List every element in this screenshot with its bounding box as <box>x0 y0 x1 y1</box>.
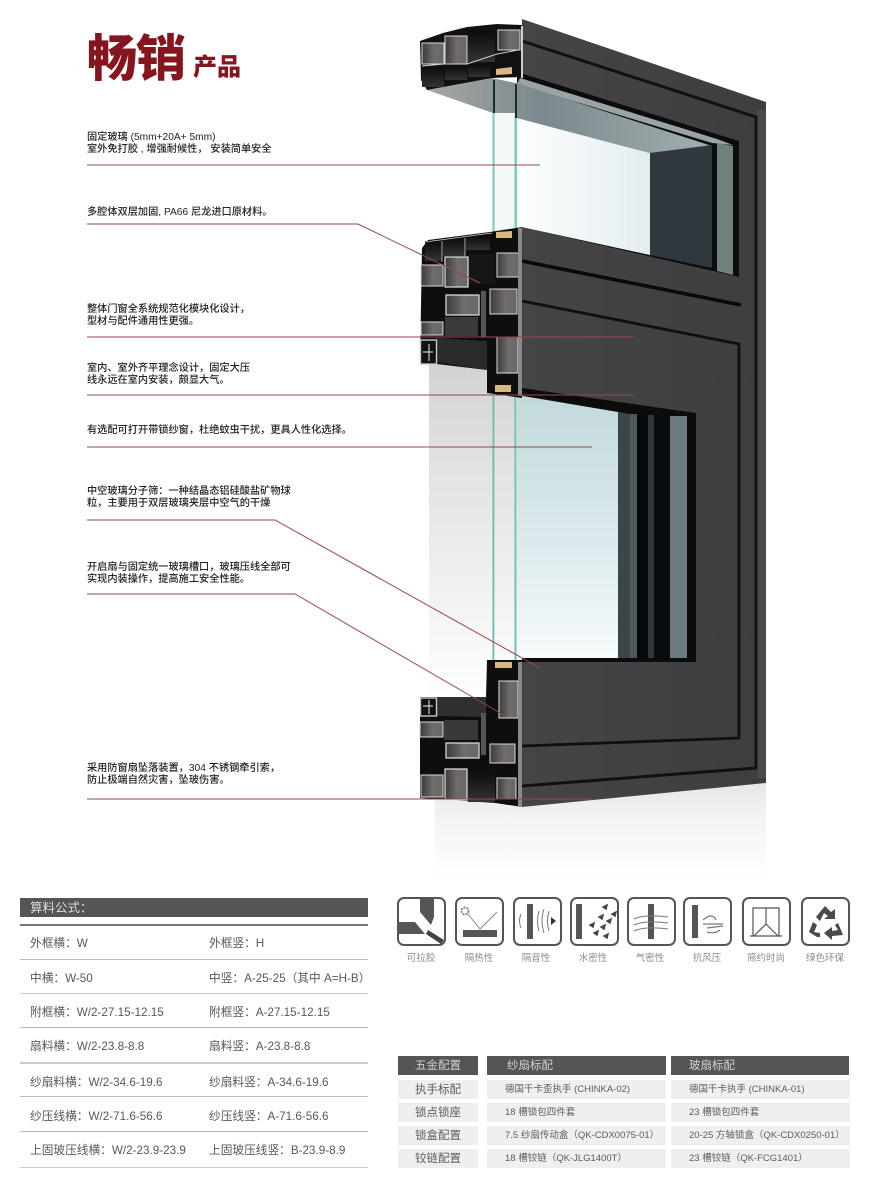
double glazing panes <box>492 80 517 662</box>
row 5 <box>20 1074 368 1097</box>
label: sealant-free: 可拉胶 <box>407 953 435 964</box>
header: hardware: 五金配置 <box>415 1060 461 1072</box>
main frame face <box>522 19 766 807</box>
icon: air tightness <box>628 898 675 945</box>
row 7: 上固玻压线竖：B-23.9-8.9 <box>209 1144 345 1157</box>
lower opening sash window <box>517 388 696 662</box>
row: hinge: 18 槽铰链（QK-JLG1400T） <box>505 1153 627 1164</box>
icon: sealant-free <box>398 898 445 945</box>
callout: molecular sieve <box>87 485 291 509</box>
callout: flush design: 线永远在室内安装，颇显大气。 <box>87 375 230 386</box>
row: lock box: 锁盒配置 <box>415 1130 461 1142</box>
row 3: 附框竖：A-27.15-12.15 <box>209 1006 330 1019</box>
callout: anti-fall device <box>87 762 280 786</box>
row 6: 纱压线竖：A-71.6-56.6 <box>209 1110 329 1123</box>
row: handle: 德国千卡歪执手 (CHINKA-02) <box>505 1084 630 1095</box>
label: green recycling: 绿色环保 <box>806 953 844 964</box>
callout: fixed glass <box>87 131 272 155</box>
row: lock seat <box>398 1103 850 1122</box>
callout: anti-fall device: 采用防窗扇坠落装置，304 不锈钢牵引索， <box>87 763 280 774</box>
header: glass sash <box>671 1056 849 1075</box>
icon: simple fashion <box>743 898 790 945</box>
row 2 <box>20 970 368 994</box>
row: lock seat: 18 槽锁包四件套 <box>505 1107 575 1118</box>
middle profile section <box>420 227 522 398</box>
icon: wind pressure <box>684 898 731 945</box>
callout: fixed glass: 固定玻璃 (5mm+20A+ 5mm) <box>87 132 216 143</box>
icon: green recycling <box>802 898 849 945</box>
label: simple fashion: 简约时尚 <box>747 953 785 964</box>
callout: anti-fall device: 防止极端自然灾害，坠玻伤害。 <box>87 775 230 786</box>
header: screen sash <box>487 1056 666 1075</box>
row: lock seat: 23 槽锁包四件套 <box>689 1107 759 1118</box>
callout: screen: 有选配可打开带锁纱窗，杜绝蚊虫干扰，更具人性化选择。 <box>87 425 352 436</box>
floor reflection <box>435 783 766 880</box>
callout: modular design <box>87 303 250 327</box>
row: handle <box>398 1080 850 1099</box>
formulas heading <box>20 898 368 917</box>
product illustration: window corner cross-section <box>87 19 766 838</box>
icon: heat insulation <box>456 898 503 945</box>
row: handle: 德国千卡执手 (CHINKA-01) <box>689 1084 805 1095</box>
row: hinge <box>398 1149 850 1168</box>
callout: multi-cavity: 多腔体双层加固, PA66 尼龙进口原材料。 <box>87 207 272 218</box>
row 2: 中横：W-50 <box>30 972 93 985</box>
bottom profile section <box>420 660 522 807</box>
row 4 <box>20 1038 368 1064</box>
header: screen sash: 纱扇标配 <box>507 1060 553 1072</box>
row: lock box: 20-25 方轴锁盒（QK-CDX0250-01） <box>689 1130 845 1141</box>
row: lock box: 7.5 纱扇传动盒（QK-CDX0075-01） <box>505 1130 659 1141</box>
insect screen mesh <box>429 360 516 705</box>
row 1: 外框竖：H <box>209 937 264 950</box>
row 3 <box>20 1004 368 1028</box>
row: hinge: 23 槽铰链（QK-FCG1401） <box>689 1153 808 1164</box>
leader lines <box>87 165 633 799</box>
row 1 <box>20 935 368 960</box>
row 2: 中竖：A-25-25（其中 A=H-B） <box>209 972 370 985</box>
label: water tightness: 水密性 <box>579 953 607 964</box>
row 6 <box>20 1108 368 1132</box>
icon: sound insulation <box>514 898 561 945</box>
formulas heading: 算料公式： <box>30 901 93 915</box>
callout: molecular sieve: 中空玻璃分子筛：一种结晶态铝硅酸盐矿物球 <box>87 486 291 497</box>
callout: flush design <box>87 362 250 386</box>
callout: flush design: 室内、室外齐平理念设计，固定大压 <box>87 363 250 374</box>
row 3: 附框横：W/2-27.15-12.15 <box>30 1006 164 1019</box>
top profile section <box>420 24 523 90</box>
title main: 畅销 <box>87 31 185 87</box>
callout: modular design: 整体门窗全系统规范化模块化设计， <box>87 304 250 315</box>
title sub: 产品 <box>193 54 241 81</box>
label: sound insulation: 隔音性 <box>522 953 550 964</box>
row 7: 上固玻压线横：W/2-23.9-23.9 <box>30 1144 186 1157</box>
row 6: 纱压线横：W/2-71.6-56.6 <box>30 1110 162 1123</box>
callout: fixed glass: 室外免打胶 , 增强耐候性， 安装简单安全 <box>87 144 272 155</box>
header: glass sash: 玻扇标配 <box>689 1060 735 1072</box>
row 5: 纱扇料竖：A-34.6-19.6 <box>209 1076 329 1089</box>
panel: hardware configuration table <box>398 1056 850 1168</box>
row: handle: 执手标配 <box>415 1084 461 1096</box>
row 5: 纱扇料横：W/2-34.6-19.6 <box>30 1076 162 1089</box>
icon: water tightness <box>571 898 618 945</box>
callout: glass groove: 开启扇与固定统一玻璃槽口，玻璃压线全部可 <box>87 562 291 573</box>
title <box>87 31 241 87</box>
row 4: 扇料横：W/2-23.8-8.8 <box>30 1040 144 1053</box>
heading rule <box>20 924 368 926</box>
upper fixed glass window <box>427 72 739 277</box>
row: lock box <box>398 1126 850 1145</box>
label: wind pressure: 抗风压 <box>693 953 721 964</box>
row 1: 外框横：W <box>30 937 88 950</box>
header: hardware <box>398 1056 478 1075</box>
row: lock seat: 锁点锁座 <box>415 1107 461 1119</box>
callout: modular design: 型材与配件通用性更强。 <box>87 316 199 327</box>
row 7 <box>20 1142 368 1168</box>
panel: performance icons <box>397 897 850 946</box>
callout: glass groove: 实现内装操作，提高施工安全性能。 <box>87 574 250 585</box>
label: heat insulation: 隔热性 <box>465 953 493 964</box>
callout: glass groove <box>87 561 291 585</box>
callout: molecular sieve: 粒，主要用于双层玻璃夹层中空气的干燥 <box>87 498 270 509</box>
row 4: 扇料竖：A-23.8-8.8 <box>209 1040 310 1053</box>
panel: cutting formulas <box>20 898 370 1168</box>
row: hinge: 铰链配置 <box>415 1153 461 1165</box>
label: air tightness: 气密性 <box>636 953 664 964</box>
